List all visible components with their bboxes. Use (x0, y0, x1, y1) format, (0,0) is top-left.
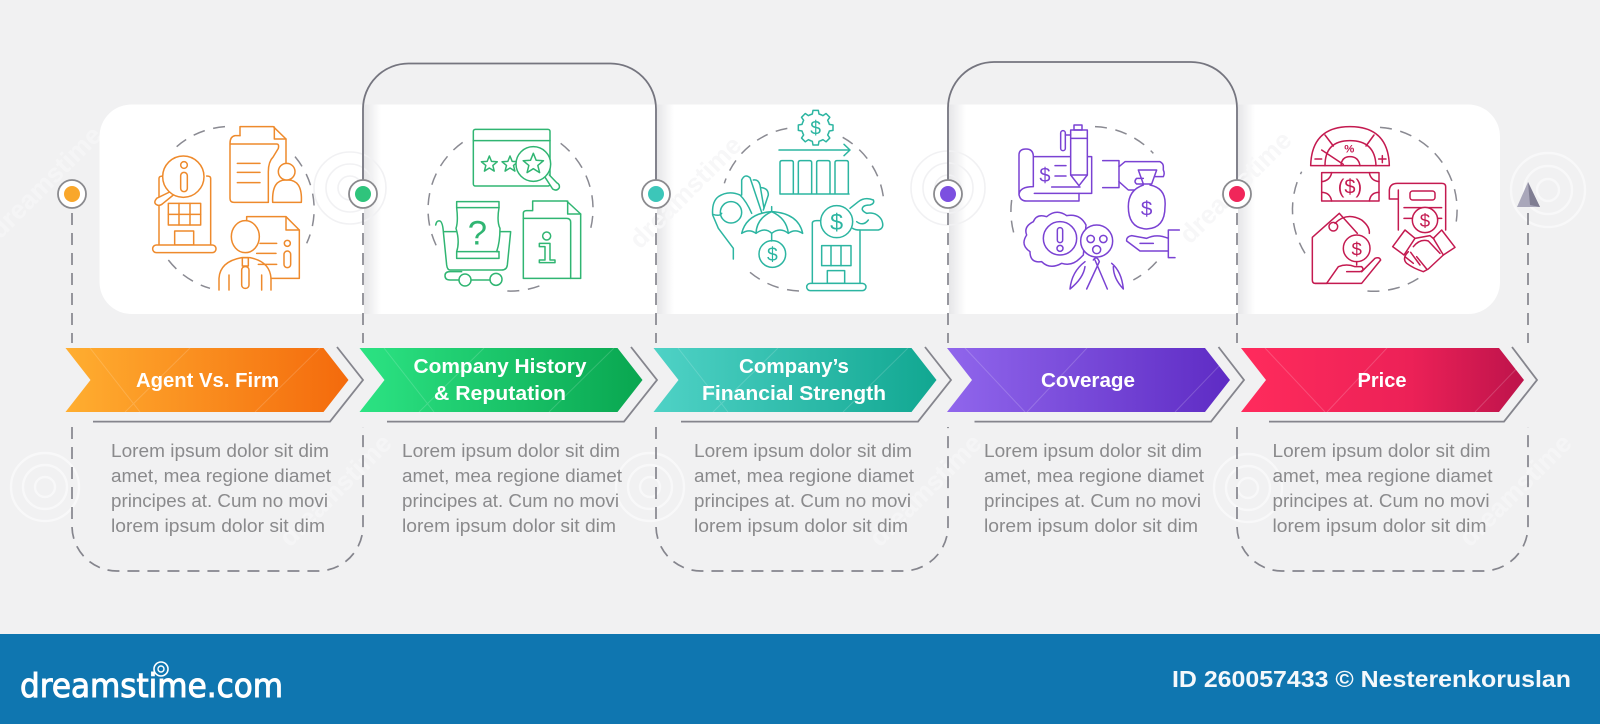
watermark spirals on background: dreamstime (1453, 428, 1577, 552)
top arc connector 4 to 5 (948, 62, 1237, 180)
marker: teal (642, 180, 670, 208)
text block: column 1: amet, mea regione diamet (111, 465, 331, 486)
heading: price: Price (1358, 369, 1406, 392)
text block: column 5: lorem ipsum dolor sit dim (1272, 515, 1486, 536)
watermark spirals on background: dreamstime (273, 428, 397, 552)
heading: agent vs firm: Agent Vs. Firm (136, 369, 279, 392)
text block: column 5: principes at. Cum no movi (1272, 490, 1490, 511)
text block: column 4: lorem ipsum dolor sit dim (984, 515, 1198, 536)
icon: price: % (1344, 143, 1354, 155)
arrow: coverage (947, 347, 1244, 422)
icon: agent vs firm (153, 127, 314, 290)
marker: purple (934, 180, 962, 208)
watermark spirals on background: dreamstime (863, 428, 987, 552)
footer credit: ID 260057433 © Nesterenkoruslan (1172, 666, 1571, 692)
dashed frame: column 3 (656, 427, 948, 571)
icon: financial strength: $ (830, 209, 843, 235)
icon: company history and reputation: ? (468, 214, 487, 252)
arrow: agent vs firm (66, 347, 363, 422)
text block: column 3: amet, mea regione diamet (694, 465, 914, 486)
panel: white icon card: dreamstime (1173, 125, 1297, 249)
icon: company history and reputation (428, 129, 593, 291)
text block: column 4: principes at. Cum no movi (984, 490, 1201, 511)
icon: coverage (1011, 125, 1179, 289)
icon: price (1292, 127, 1457, 291)
heading: coverage: Coverage (1041, 369, 1135, 392)
text block: column 1: Lorem ipsum dolor sit dim (111, 440, 329, 461)
text block: column 2: Lorem ipsum dolor sit dim (402, 440, 620, 461)
icon: financial strength: $ (767, 245, 778, 266)
dashed frame: column 1 (72, 427, 363, 571)
top arc connector 2 to 3 (363, 64, 656, 180)
panel: white icon card (100, 104, 1500, 314)
text block: column 5: Lorem ipsum dolor sit dim (1272, 440, 1490, 461)
heading: company history and reputation: Company History (414, 355, 587, 378)
text block: column 2: lorem ipsum dolor sit dim (402, 515, 616, 536)
arrow: price (1241, 347, 1537, 422)
watermark spirals on background (0, 120, 1585, 552)
footer band (0, 634, 1600, 724)
arrow: company history and reputation (360, 347, 657, 422)
arrow: company's financial strength (654, 347, 951, 422)
text block: column 4: amet, mea regione diamet (984, 465, 1204, 486)
marker: green (349, 180, 377, 208)
icon: price: $ (1420, 210, 1431, 231)
text block: column 5: amet, mea regione diamet (1272, 465, 1492, 486)
icon: coverage: $ (1039, 165, 1051, 187)
heading: company history and reputation: & Reputation (434, 382, 566, 405)
heading: company's financial strength: Financial Strength (702, 382, 886, 405)
marker: orange (58, 180, 86, 208)
text block: column 2: amet, mea regione diamet (402, 465, 622, 486)
icon: coverage: $ (1141, 197, 1153, 220)
text block: column 3: Lorem ipsum dolor sit dim (694, 440, 912, 461)
text block: column 2: principes at. Cum no movi (402, 490, 619, 511)
dashed frame: column 5 (1237, 427, 1528, 571)
marker: end triangle (1517, 182, 1540, 207)
text block: column 3: lorem ipsum dolor sit dim (694, 515, 908, 536)
icon: price: ($) (1338, 177, 1362, 199)
icon: financial strength: $ (810, 119, 821, 140)
panel: white icon card: dreamstime (623, 130, 747, 254)
text block: column 1: principes at. Cum no movi (111, 490, 328, 511)
marker: red (1223, 180, 1251, 208)
heading: company's financial strength: Company’s (739, 355, 849, 378)
icon: financial strength (713, 110, 884, 291)
text block: column 1: lorem ipsum dolor sit dim (111, 515, 325, 536)
icon: price: $ (1351, 238, 1362, 259)
text block: column 4: Lorem ipsum dolor sit dim (984, 440, 1202, 461)
footer logo: dreamstime.com (20, 666, 283, 705)
dashed connectors above the arrows (72, 213, 1528, 343)
text block: column 3: principes at. Cum no movi (694, 490, 911, 511)
